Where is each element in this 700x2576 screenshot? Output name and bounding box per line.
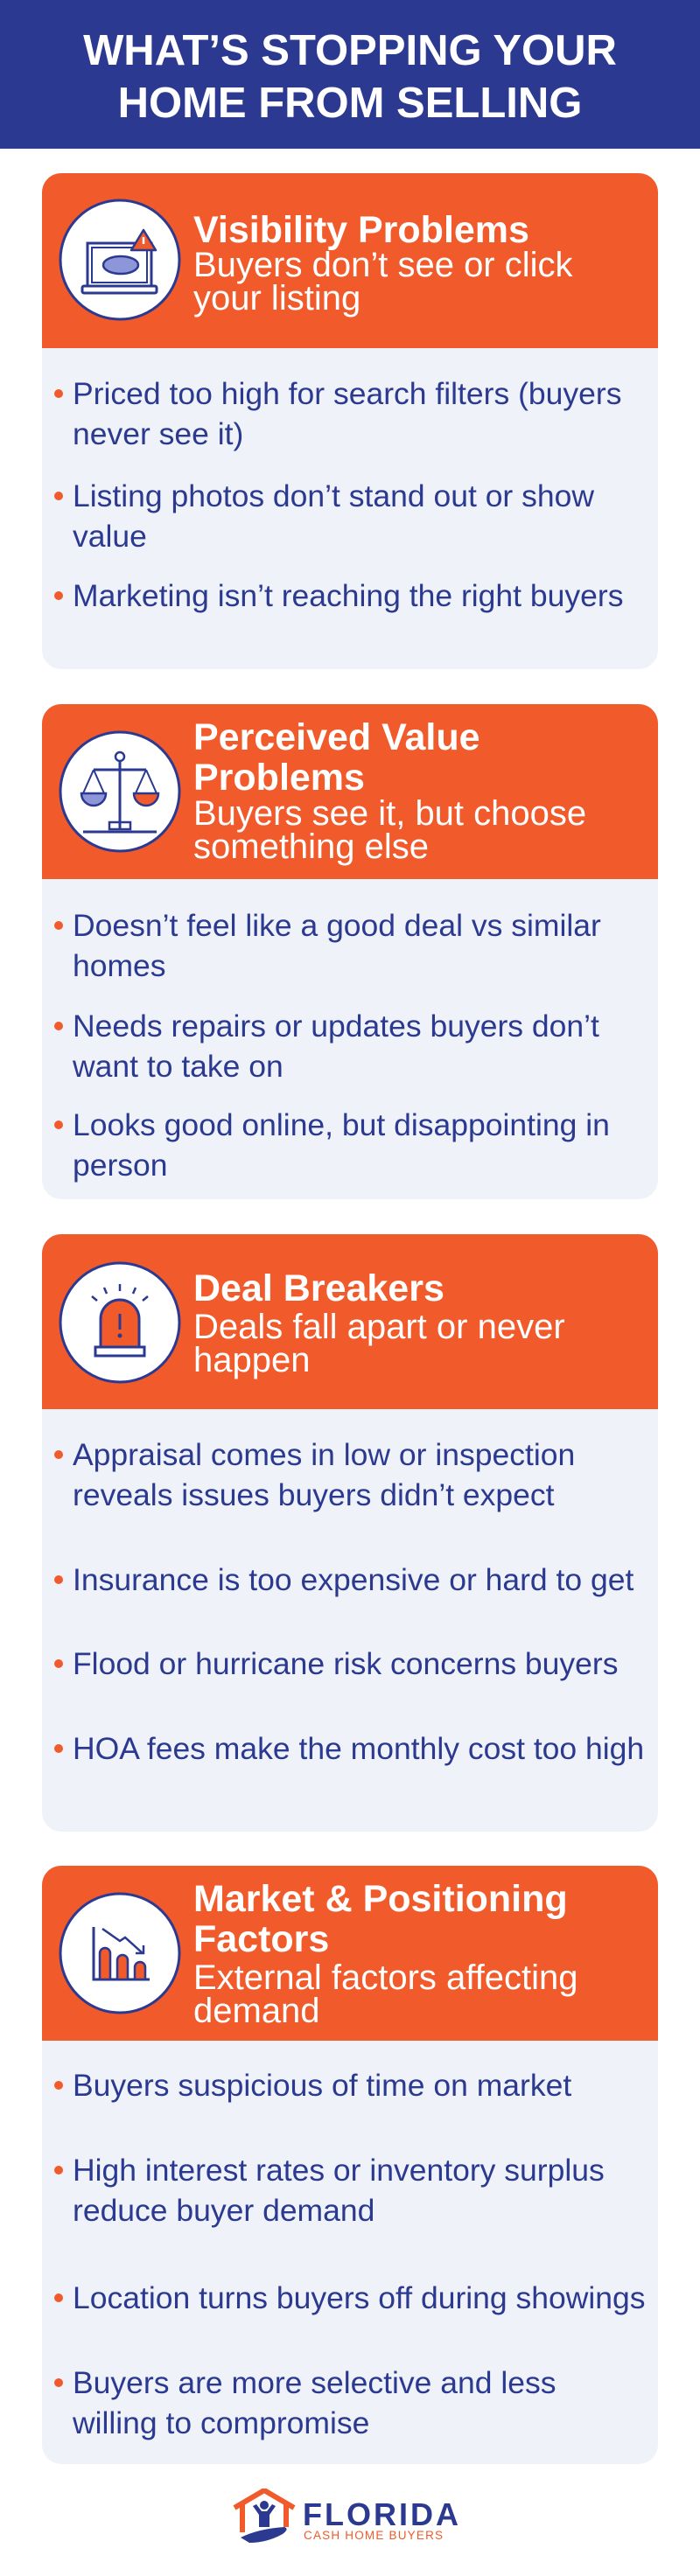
panel: visibility problems [42, 173, 658, 669]
heading: perceived value: Perceived Value [193, 716, 480, 758]
bullet: Location turns buyers off during showings [73, 2280, 646, 2315]
heading: market: Market & Positioning [193, 1878, 568, 1920]
bullet: person [73, 1148, 168, 1183]
icon: declining chart [60, 1893, 180, 2014]
bullet: never see it) [73, 416, 243, 451]
subtitle: perceived value: Buyers see it, but choose [193, 794, 586, 833]
icon: laptop with warning [60, 199, 180, 320]
brand name: FLORIDA [303, 2496, 461, 2532]
panel: perceived value [42, 704, 658, 1199]
heading: perceived value: Problems [193, 757, 365, 799]
bullet [73, 2150, 605, 2230]
heading: visibility: Visibility Problems [193, 209, 529, 251]
bullet: value [73, 519, 147, 554]
title: HOME FROM SELLING [118, 80, 582, 127]
subtitle: visibility: Buyers don’t see or click [193, 246, 573, 284]
bullet: Buyers are more selective and less [73, 2365, 556, 2400]
title [83, 27, 617, 127]
bullet: Listing photos don’t stand out or show [73, 478, 594, 513]
bullet: High interest rates or inventory surplus [73, 2153, 605, 2188]
panel: deal breakers [42, 1234, 658, 1832]
bullet: Priced too high for search filters (buyers [73, 376, 621, 411]
subtitle: perceived value: something else [193, 827, 429, 866]
subtitle: deal breakers: happen [193, 1341, 310, 1379]
bullet: Doesn’t feel like a good deal vs similar [73, 908, 601, 943]
bullet: reveals issues buyers didn’t expect [73, 1477, 555, 1512]
heading: deal breakers: Deal Breakers [193, 1267, 444, 1309]
panel: market factors [42, 1866, 658, 2464]
bullet: Marketing isn’t reaching the right buyers [73, 578, 623, 613]
subtitle: deal breakers: Deals fall apart or never [193, 1308, 565, 1346]
subtitle: market [193, 1958, 578, 2030]
bullet [73, 1435, 575, 1515]
bullet: Needs repairs or updates buyers don’t [73, 1009, 599, 1044]
heading: market: Factors [193, 1918, 329, 1960]
heading: perceived value [193, 716, 480, 799]
bullet: HOA fees make the monthly cost too high [73, 1731, 644, 1766]
bullet: Looks good online, but disappointing in [73, 1107, 610, 1142]
icon: alarm siren [60, 1261, 180, 1384]
bullet: want to take on [73, 1049, 284, 1084]
bullet: Buyers suspicious of time on market [73, 2068, 571, 2103]
icon: scales [60, 731, 180, 852]
subtitle: deal breakers [193, 1308, 565, 1379]
heading: market [193, 1878, 568, 1960]
bullet [73, 905, 601, 986]
subtitle: visibility: your listing [193, 279, 360, 318]
subtitle: market: demand [193, 1992, 320, 2030]
bullet [73, 1006, 599, 1086]
bullet [73, 1105, 610, 1185]
bullet: Insurance is too expensive or hard to get [73, 1562, 634, 1597]
bullet: willing to compromise [73, 2405, 369, 2440]
subtitle: perceived value [193, 794, 586, 866]
header banner [0, 0, 700, 149]
brand tagline: CASH HOME BUYERS [304, 2529, 444, 2542]
icon: house logo [233, 2489, 296, 2543]
bullet: reduce buyer demand [73, 2193, 374, 2228]
subtitle: market: External factors affecting [193, 1958, 578, 1997]
bullet [73, 373, 621, 454]
bullet: homes [73, 948, 166, 983]
bullet: Appraisal comes in low or inspection [73, 1437, 575, 1472]
title: WHAT’S STOPPING YOUR [83, 27, 617, 74]
bullet [73, 2363, 556, 2443]
logo [233, 2489, 461, 2543]
subtitle: visibility [193, 246, 573, 318]
bullet: Flood or hurricane risk concerns buyers [73, 1646, 618, 1681]
bullet [73, 476, 594, 556]
